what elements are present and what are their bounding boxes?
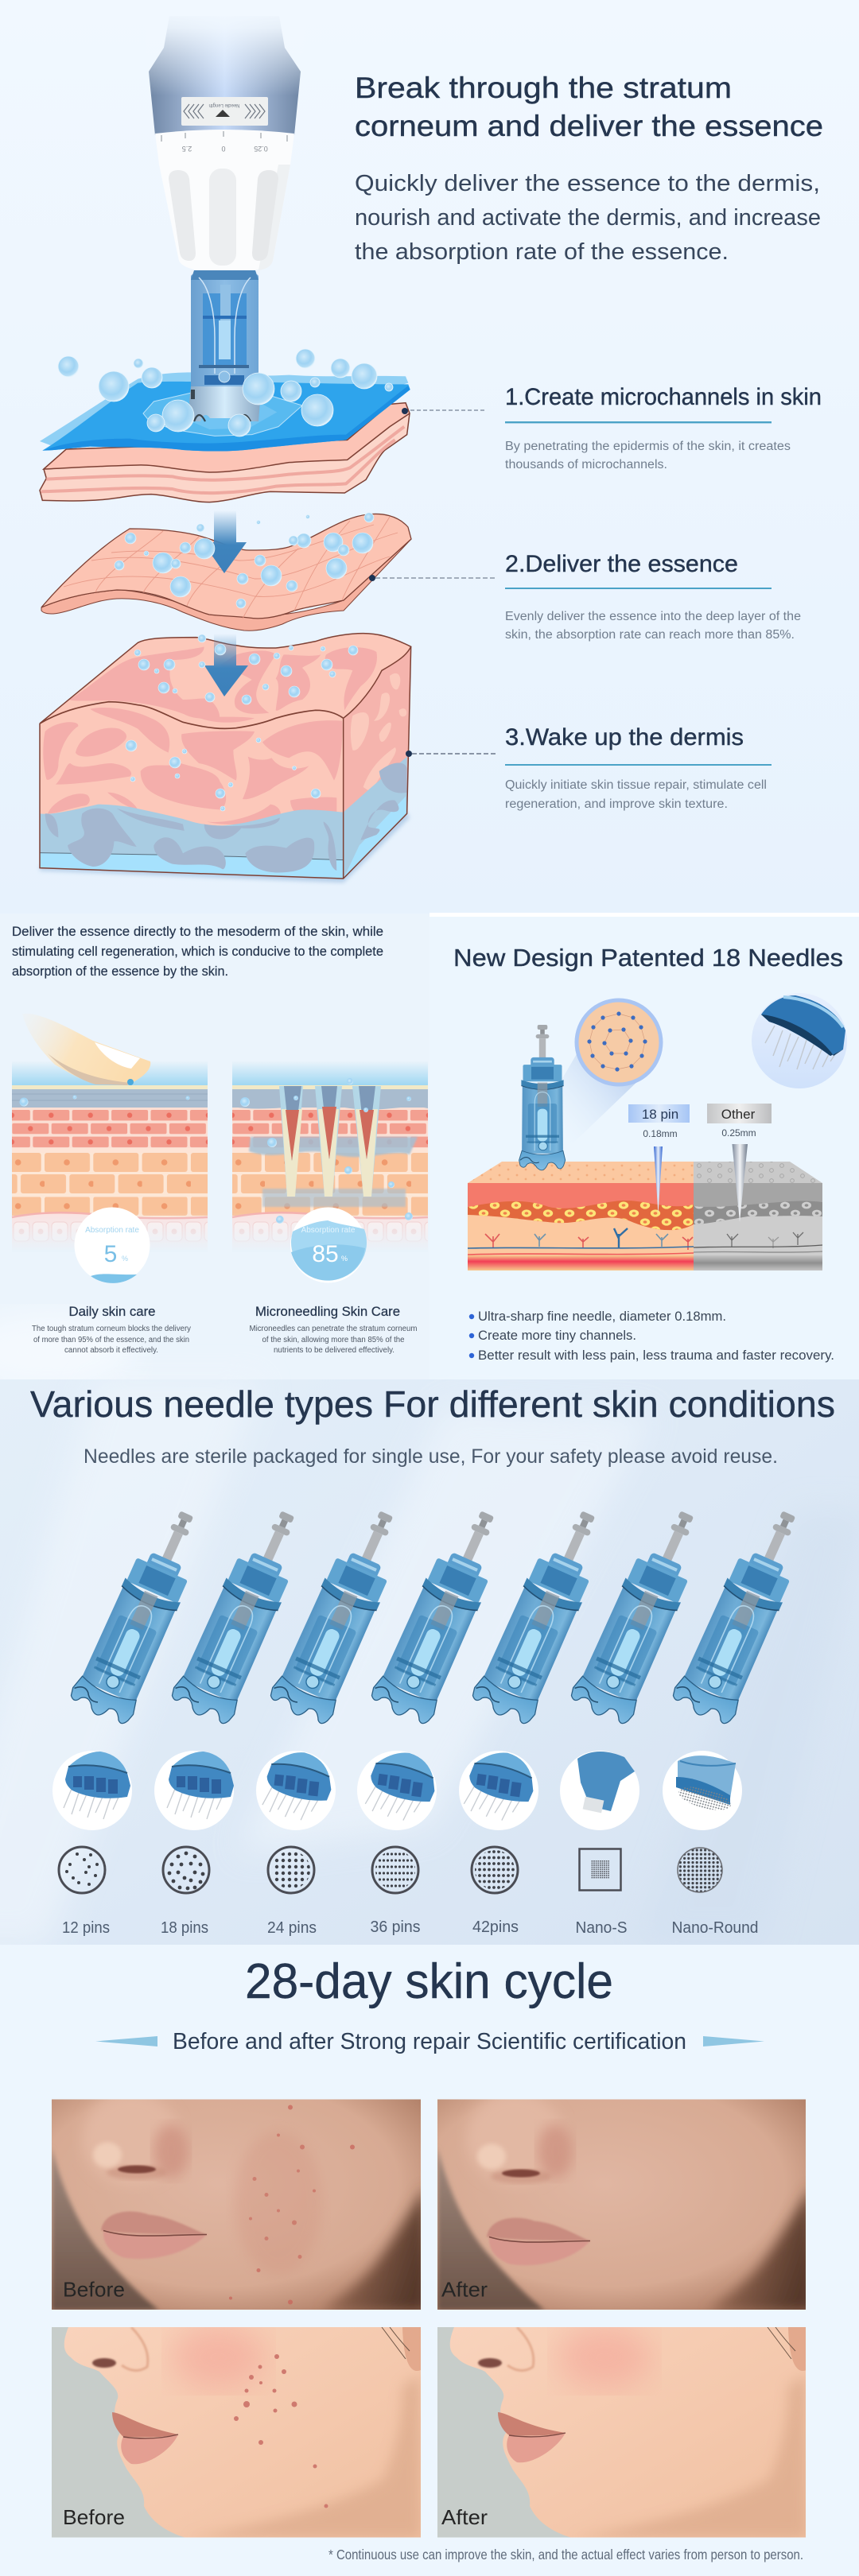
step 3 text: 3.Wake up the dermis (505, 724, 744, 751)
photo: before, front face: Before (63, 2277, 125, 2301)
pin labels: 18 pins (161, 1919, 208, 1937)
white adjustment collar (155, 130, 294, 273)
chart: absorption rate 85%: % (341, 1255, 348, 1263)
pin labels: Nano-S (576, 1919, 627, 1937)
step 3 text: Quickly initiate skin tissue repair, stimulate cell (505, 778, 767, 792)
text: microneedling description (250, 1325, 417, 1355)
photo: after, side face (437, 2326, 811, 2538)
panel: skin block layer 3 (40, 634, 411, 883)
feature bullets (469, 1309, 834, 1363)
chart: absorption rate 5%: 5 (104, 1241, 117, 1267)
chart: absorption rate 5%: Absorption rate (85, 1226, 139, 1235)
step 2 text: skin, the absorption rate can reach more than 85%. (505, 628, 795, 642)
white adjustment collar: 0.25 (254, 145, 268, 153)
step 1 text: By penetrating the epidermis of the skin, it creates (505, 440, 791, 453)
diagram: daily skin care (12, 1014, 208, 1355)
blue essence sheet (40, 372, 410, 452)
panel: skin layer 1 with blue sheet (40, 372, 487, 502)
bubbles above sheet (58, 349, 393, 436)
feature bullets: Ultra-sharp fine needle, diameter 0.18mm. (478, 1309, 726, 1324)
pin labels (62, 1918, 759, 1937)
text: microneedling description: of the skin, allowing more than 85% of the (262, 1336, 405, 1344)
dot and dashed connector 2 (369, 575, 496, 581)
label: 18 pin: 0.18mm (643, 1128, 678, 1139)
heading: break through: Break through the stratum (355, 72, 732, 104)
white adjustment collar: 0 (221, 145, 226, 153)
heading: various needle types: Various needle types For different skin conditions (30, 1383, 835, 1425)
text: microneedling description: nutrients to be delivered effectively. (274, 1346, 395, 1355)
subtitle: sterile packaging: Needles are sterile packaged for single use, For your safety please avoid reuse. (84, 1445, 778, 1468)
photo: before, side face (52, 2326, 426, 2538)
intro paragraph (355, 171, 821, 265)
side face (344, 646, 411, 879)
heading: patented 18 needles: New Design Patented 18 Needles (453, 944, 843, 972)
icon: finger applying essence (22, 1014, 150, 1085)
skin block left: 18 pin (468, 1162, 694, 1271)
icon: cartridge on skin (519, 1025, 566, 1170)
icon: needle cartridge on pen (189, 270, 260, 421)
subtitle with tapered accents: Before and after Strong repair Scientific certification (173, 2029, 686, 2054)
intro paragraph: Quickly deliver the essence to the dermis, (355, 171, 820, 196)
step 3 text: regeneration, and improve skin texture. (505, 797, 728, 811)
heading line 2: corneum and deliver the essence (355, 110, 823, 142)
needle channels (232, 1086, 428, 1207)
subcutaneous blue-grey layer (40, 805, 344, 879)
pin labels: 12 pins (62, 1919, 110, 1937)
label: other (707, 1104, 772, 1222)
intro text: stimulating cell regeneration, which is conducive to the complete (12, 945, 383, 959)
pin labels: Nano-Round (671, 1919, 759, 1937)
diagram: microneedling skin care (232, 1061, 428, 1355)
bubbles on layer 2 and layer 3 (115, 513, 374, 811)
skin block right: other needle (694, 1162, 822, 1271)
icon: magnifier cone (561, 1053, 643, 1150)
background: section 1 (0, 0, 859, 914)
step 3 text (505, 724, 772, 811)
pen upper grip (146, 11, 304, 135)
icon: microneedle pen handpiece (146, 11, 304, 273)
top face (40, 634, 411, 728)
intro text: absorption of the essence by the skin. (12, 964, 228, 979)
dot and dashed connector 3 (406, 751, 496, 757)
icon: needle head close-up (752, 993, 847, 1088)
text: daily description: The tough stratum corneum blocks the delivery (32, 1325, 191, 1333)
photo: before, front face (52, 2093, 430, 2312)
cartridges row (67, 1500, 818, 1728)
panel: needle types (30, 1383, 835, 1937)
chart: absorption rate 5%: % (122, 1255, 128, 1263)
text: daily description (32, 1325, 191, 1355)
arrow: down arrow 1 (203, 510, 247, 573)
label: 18 pin (628, 1104, 690, 1214)
photo: after, front face (437, 2093, 815, 2312)
photo: after, side face: After (441, 2505, 488, 2529)
white adjustment collar: 2.5 (182, 145, 192, 153)
panel: absorption comparison (12, 925, 428, 1355)
feature bullets: Better result with less pain, less trauma and faster recovery. (478, 1348, 834, 1363)
step 1 text: thousands of microchannels. (505, 458, 667, 471)
chart: absorption rate 5% (75, 1207, 150, 1283)
label: daily skin care: Daily skin care (68, 1304, 156, 1319)
panel: 18 needles design (453, 944, 847, 1363)
pin labels: 36 pins (371, 1918, 420, 1936)
step 1 text (505, 384, 822, 471)
intro text (12, 925, 383, 979)
heading: 28-day skin cycle: 28-day skin cycle (245, 1954, 613, 2009)
label: 18 pin: 18 pin (642, 1107, 678, 1122)
intro paragraph: the absorption rate of the essence. (355, 239, 729, 265)
photo: before, side face: Before (63, 2505, 125, 2529)
text: microneedling description: Microneedles can penetrate the stratum corneum (250, 1325, 417, 1333)
label: microneedling skin care: Microneedling Skin Care (255, 1304, 400, 1319)
background: section 3 (0, 1379, 859, 1945)
chart: absorption rate 85%: 85 (312, 1241, 339, 1267)
needle heads row (52, 1748, 742, 1830)
background: section 4 (0, 1945, 859, 2576)
chart: absorption rate 85%: Absorption rate (301, 1226, 356, 1235)
chart: absorption rate 85% (290, 1207, 367, 1283)
needle length label: Needle Length (208, 103, 240, 107)
pin labels: 42pins (472, 1918, 519, 1936)
needle length label (181, 97, 268, 126)
dot and dashed connector 1 (402, 408, 487, 414)
background: section 2 (0, 913, 859, 1391)
front face (40, 646, 411, 879)
feature bullets: Create more tiny channels. (478, 1328, 636, 1343)
arrow: down arrow 2 (204, 634, 248, 696)
panel: 28-day skin cycle (52, 1954, 815, 2562)
label: other: 0.25mm (721, 1127, 756, 1139)
step 2 text: 2.Deliver the essence (505, 551, 738, 577)
photo: after, front face: After (441, 2277, 488, 2301)
intro paragraph: nourish and activate the dermis, and increase (355, 205, 821, 231)
pink epidermis layer (40, 403, 410, 502)
shadow under block (40, 811, 410, 883)
step 1 text: 1.Create microchannels in skin (505, 384, 822, 410)
panel: skin layer 2 (41, 514, 496, 630)
label: other: Other (721, 1107, 756, 1122)
pin pattern icons (59, 1847, 722, 1893)
step 2 text: Evenly deliver the essence into the deep layer of the (505, 610, 801, 623)
text: daily description: of more than 95% of the essence, and the skin (33, 1336, 189, 1344)
step 2 text (505, 551, 801, 642)
icon: skin magnifier with needle points (577, 1000, 661, 1084)
pin labels: 24 pins (267, 1919, 317, 1937)
intro text: Deliver the essence directly to the mesoderm of the skin, while (12, 925, 383, 939)
text: daily description: cannot absorb it effectively. (64, 1346, 158, 1355)
